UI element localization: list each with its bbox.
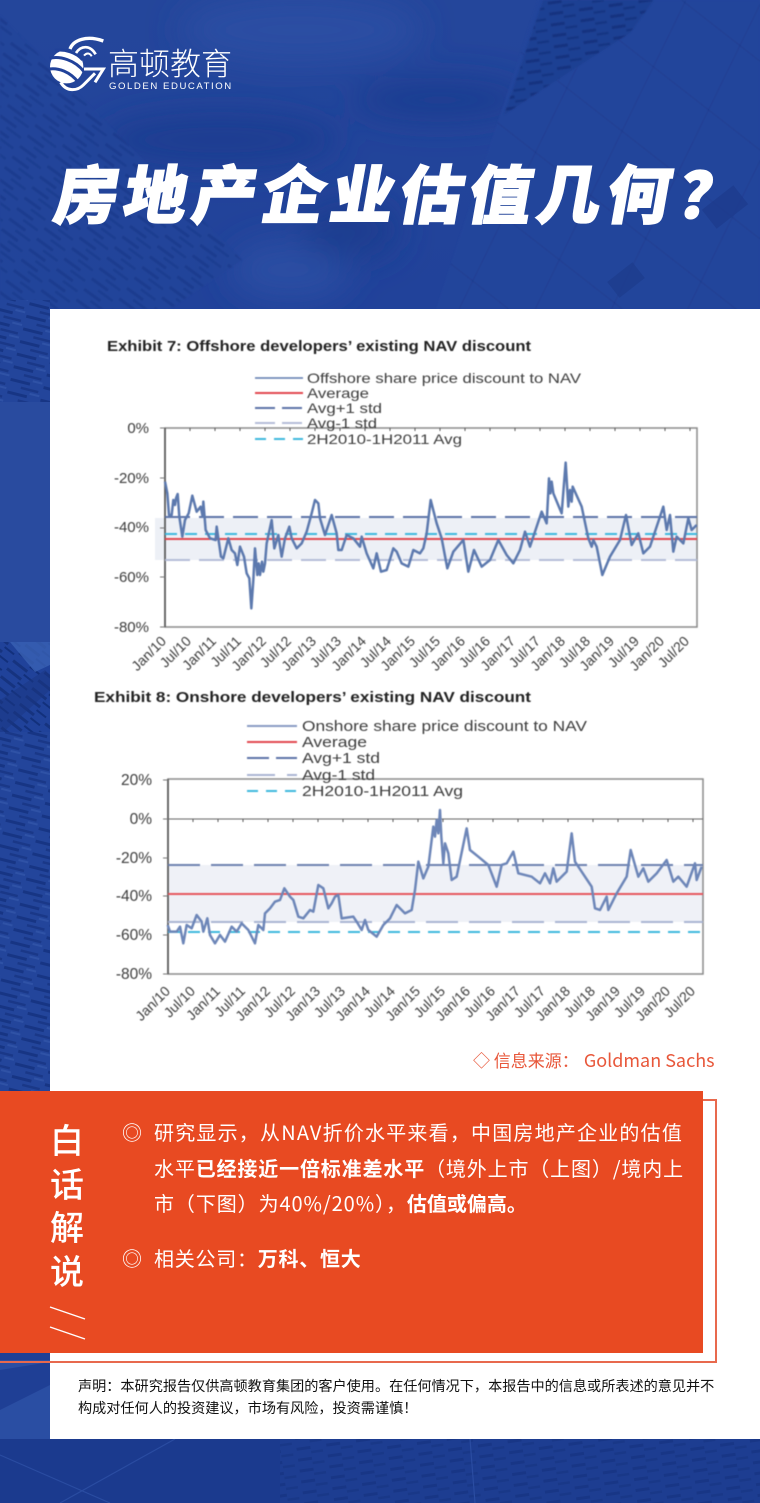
x axis labels: Jan/16: [432, 983, 473, 1024]
x axis labels: Jan/12: [232, 983, 273, 1024]
x axis labels: Jul/20: [654, 633, 692, 671]
legend: Average: [307, 385, 369, 401]
onshore series line: [168, 810, 702, 943]
x axis labels: Jul/19: [610, 983, 648, 1021]
x axis labels: Jul/20: [660, 983, 698, 1021]
panel: orange commentary: [0, 1091, 703, 1353]
y axis labels: 0%: [127, 420, 149, 437]
x axis labels: Jul/14: [360, 983, 398, 1021]
x axis labels: Jul/11: [207, 633, 244, 670]
x axis labels: Jul/14: [356, 633, 394, 671]
icon: double slash: [50, 1306, 86, 1340]
legend: 2H2010-1H2011 Avg: [307, 431, 462, 447]
vertical heading: 白: [50, 1114, 84, 1163]
x axis labels: Jan/13: [282, 983, 323, 1024]
chart: Exhibit 7 offshore NAV discount: [107, 339, 698, 674]
bullet 1 text: 研究显示，从NAV折价水平来看，中国房地产企业的估值: [154, 1117, 683, 1146]
reference lines: [165, 517, 697, 560]
x axis labels: [128, 633, 692, 674]
icon: globe logo: [50, 36, 106, 92]
x axis labels: Jul/10: [160, 983, 198, 1021]
y axis labels: -40%: [116, 888, 152, 905]
logo english name: GOLDEN EDUCATION: [109, 81, 233, 92]
y axis labels: -60%: [114, 569, 149, 586]
std band: [168, 865, 703, 922]
y axis labels: -20%: [116, 850, 152, 867]
x axis labels: Jan/12: [228, 633, 269, 674]
legend: [247, 719, 587, 800]
x axis labels: [132, 983, 698, 1024]
x axis labels: Jul/16: [460, 983, 498, 1021]
x axis labels: Jan/18: [527, 633, 568, 674]
x axis labels: Jan/19: [576, 633, 617, 674]
source note: ◇ 信息来源： Goldman Sachs: [473, 1047, 715, 1073]
disclaimer: 构成对任何人的投资建议，市场有风险，投资需谨慎！: [78, 1400, 417, 1416]
vertical heading: 话: [50, 1158, 84, 1206]
x axis labels: Jan/20: [632, 983, 673, 1024]
x axis labels: Jul/16: [455, 633, 493, 671]
x axis labels: Jul/17: [510, 983, 548, 1021]
x axis labels: Jul/13: [306, 633, 344, 671]
x axis labels: Jul/12: [260, 983, 298, 1021]
x axis labels: Jul/10: [156, 633, 194, 671]
x axis labels: Jan/11: [179, 633, 219, 673]
x axis labels: Jul/11: [211, 983, 248, 1020]
legend: 2H2010-1H2011 Avg: [302, 784, 463, 800]
bullet 2 text: ◎: [122, 1243, 142, 1272]
x axis labels: Jan/19: [582, 983, 623, 1024]
bottom strip: [0, 1439, 760, 1503]
std band: [155, 518, 698, 560]
chart title: Exhibit 8: Onshore developers’ existing NAV discount: [94, 690, 531, 706]
x axis labels: Jan/14: [332, 983, 373, 1024]
y axis labels: -40%: [114, 519, 149, 536]
x axis labels: Jul/18: [555, 633, 593, 671]
x axis labels: Jan/17: [477, 633, 518, 674]
chart: Exhibit 8 onshore NAV discount: [94, 690, 704, 1024]
disclaimer: 声明：本研究报告仅供高顿教育集团的客户使用。在任何情况下，本报告中的信息或所表述的意见并不: [78, 1378, 714, 1394]
y axis labels: -60%: [116, 927, 152, 944]
x axis labels: Jul/18: [560, 983, 598, 1021]
y axis labels: [116, 772, 152, 983]
x axis labels: Jan/18: [532, 983, 573, 1024]
x axis labels: Jul/19: [604, 633, 642, 671]
chart title: Exhibit 7: Offshore developers’ existing NAV discount: [107, 339, 531, 355]
legend: Avg-1 std: [302, 768, 375, 784]
legend: Average: [302, 735, 367, 751]
left building top: [0, 15, 242, 309]
x axis labels: Jan/14: [328, 633, 369, 674]
legend: Avg+1 std: [302, 751, 380, 767]
y axis labels: 20%: [121, 772, 152, 789]
outline frame behind callout: [0, 1099, 717, 1363]
legend: Avg-1 std: [307, 415, 377, 431]
x axis labels: Jan/10: [132, 983, 173, 1024]
bullet 1 text: 市（下图）为40%/20%），估值或偏高。: [154, 1188, 527, 1217]
y axis labels: -80%: [116, 966, 152, 983]
x axis labels: Jan/17: [482, 983, 523, 1024]
x axis labels: Jan/20: [626, 633, 667, 674]
bullet 1 text: 水平已经接近一倍标准差水平（境外上市（上图）/境内上: [154, 1152, 684, 1182]
y axis labels: -80%: [114, 619, 149, 636]
x axis labels: Jul/17: [505, 633, 543, 671]
x axis labels: Jul/12: [256, 633, 294, 671]
y axis labels: -20%: [114, 470, 149, 487]
legend: [255, 370, 582, 447]
x axis labels: Jan/13: [278, 633, 319, 674]
offshore series line: [165, 463, 697, 608]
y axis labels: [114, 420, 149, 636]
x axis labels: Jan/15: [377, 633, 418, 674]
left strip: [0, 300, 50, 402]
reference lines: [168, 865, 703, 932]
x axis labels: Jan/16: [427, 633, 468, 674]
y axis labels: 0%: [130, 811, 152, 828]
vertical heading: 说: [50, 1244, 84, 1294]
right building top: [436, 0, 760, 309]
plot frame: [168, 779, 703, 974]
vertical heading: 解: [50, 1201, 84, 1250]
x axis labels: Jul/15: [410, 983, 448, 1021]
legend: Offshore share price discount to NAV: [307, 370, 582, 386]
title: 房地产企业估值几何？: [49, 162, 755, 232]
bullet 1 text: [122, 1117, 684, 1217]
panel: white content card: [50, 309, 760, 1439]
x axis labels: Jan/15: [382, 983, 423, 1024]
bullet 2 text: 相关公司：万科、恒大: [154, 1243, 362, 1272]
bullet 1 text: ◎: [122, 1117, 142, 1146]
x axis labels: Jan/11: [183, 983, 223, 1023]
disclaimer: [78, 1378, 714, 1416]
legend: Onshore share price discount to NAV: [302, 719, 587, 735]
plot frame: [165, 428, 697, 627]
x axis labels: Jul/13: [310, 983, 348, 1021]
logo: [50, 36, 233, 92]
legend: Avg+1 std: [307, 400, 382, 416]
logo wordmark: 高顿教育: [108, 47, 232, 82]
x axis labels: Jul/15: [405, 633, 443, 671]
x axis labels: Jan/10: [128, 633, 169, 674]
vertical heading: [50, 1114, 84, 1294]
